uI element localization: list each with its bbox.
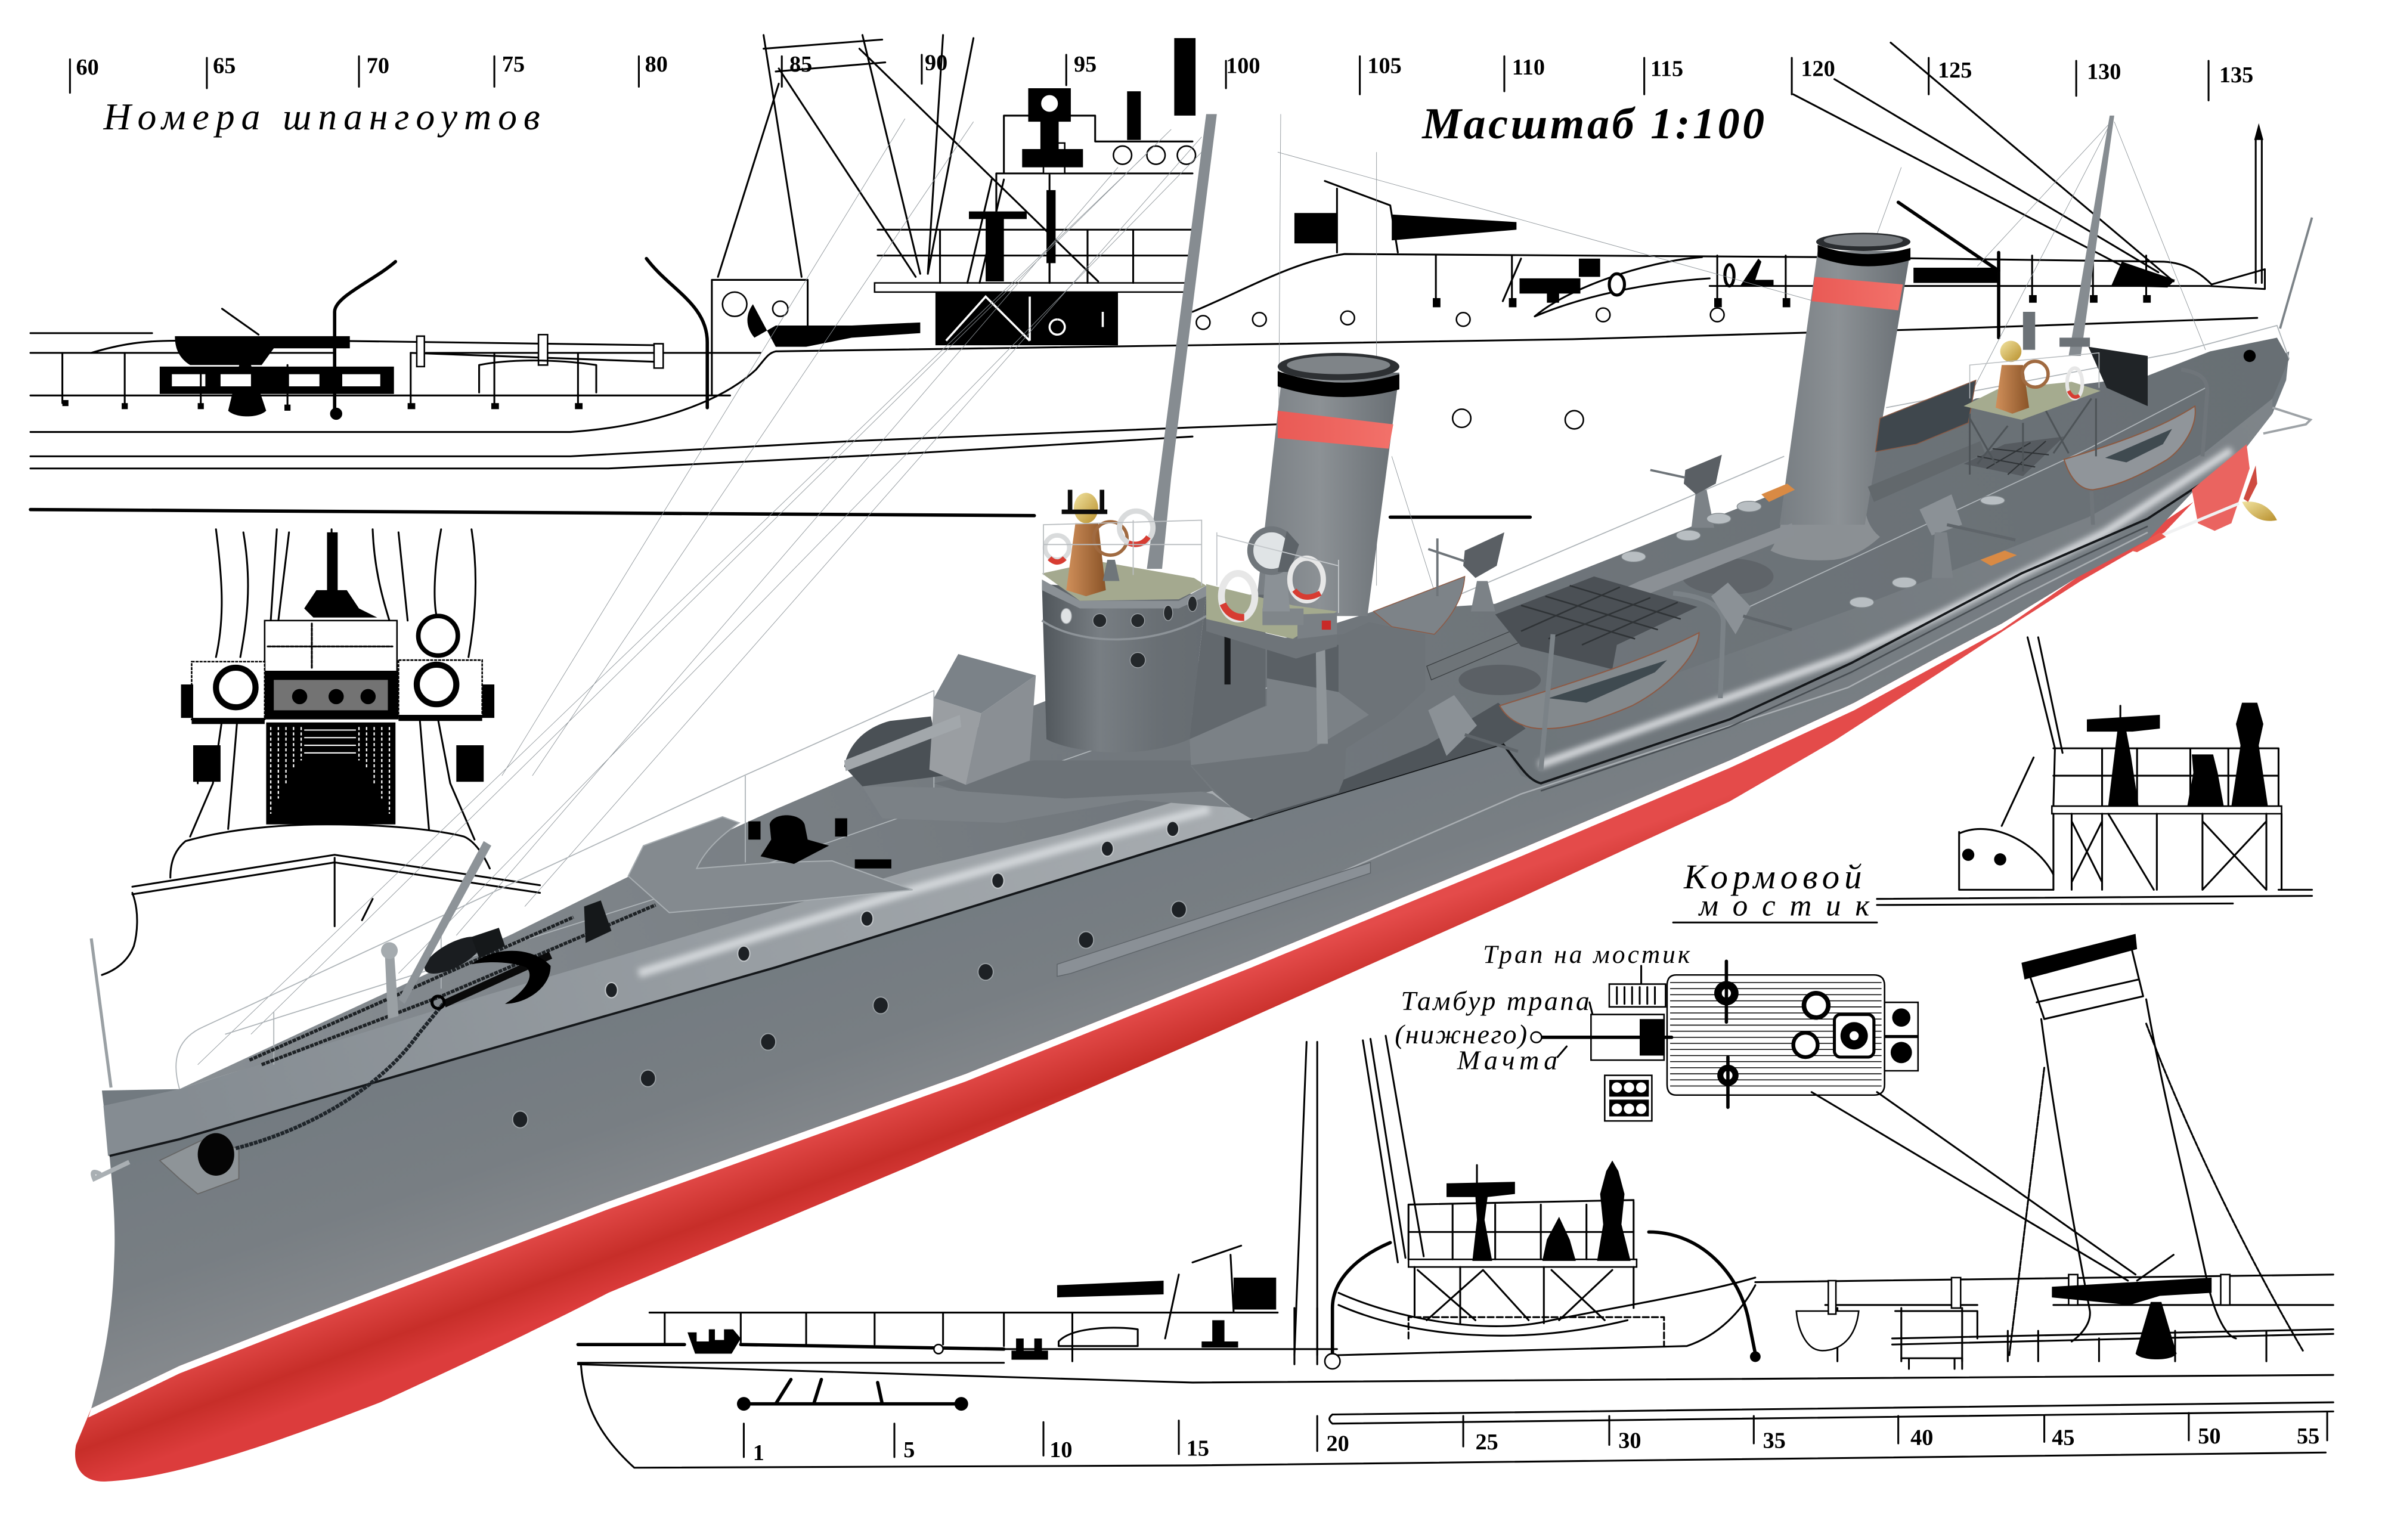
red underwater hull [75, 502, 2194, 1482]
frame numbers bottom [744, 1413, 2327, 1465]
forward far boat [1374, 577, 1465, 634]
top row portholes [605, 822, 1179, 998]
deck guns [1428, 455, 2015, 756]
sheer line [110, 461, 2236, 1156]
frame numbers top: 75 [502, 52, 525, 77]
stern fittings [2131, 218, 2312, 552]
aft boats [1875, 380, 2195, 489]
frame numbers top: 80 [645, 52, 668, 77]
drawing: aft bridge elevation [1877, 637, 2312, 905]
scuttles [1196, 308, 1724, 429]
fairlead and windlass [419, 900, 612, 981]
aft mast [2068, 116, 2114, 356]
aft gun [1294, 181, 1516, 253]
heading: scale: Масштаб 1:100 [1421, 100, 1764, 148]
anchor chain [236, 1001, 445, 1148]
aft shoulder highlight [1540, 450, 2231, 765]
aft shoulder band [1503, 398, 2272, 783]
bridge lower deck [1190, 678, 1369, 765]
bridge platform [1408, 1160, 1664, 1346]
hull lines [578, 1275, 2333, 1468]
hull lines [30, 254, 2265, 517]
davit boom [737, 1380, 968, 1411]
frame numbers bottom: 35 [1763, 1429, 1786, 1454]
plan labels: (нижнего) [1395, 1019, 1527, 1049]
boat shape [1959, 829, 2053, 890]
boat davits [1325, 1232, 1761, 1369]
deck lines [1877, 890, 2312, 905]
bridge support strut [1316, 640, 1328, 743]
boat and tubes [1797, 1275, 2230, 1369]
forecastle chains [249, 905, 655, 1065]
frame numbers top: 100 [1226, 53, 1260, 78]
aft breakwater platform [862, 779, 1232, 823]
orange gratings [1761, 484, 2017, 566]
frame numbers bottom: 45 [2052, 1426, 2075, 1451]
bridge wing and searchlight [1206, 529, 1339, 659]
mast [2028, 637, 2062, 806]
skylight grid [1495, 436, 2064, 669]
frame numbers bottom: 55 [2297, 1424, 2319, 1449]
forward funnel [1255, 353, 1399, 616]
frame numbers top: 110 [1512, 55, 1545, 80]
porthole band [263, 671, 398, 720]
helm on forward bridge [1043, 489, 1201, 596]
drawing: bow front view [102, 529, 540, 975]
plan labels: Тамбур трапа [1401, 986, 1590, 1016]
rear wall behind bridge [1267, 645, 1339, 692]
frame numbers bottom: 25 [1475, 1430, 1498, 1455]
forward shoulder band [103, 791, 1253, 1156]
stem jackstaff [91, 938, 111, 1087]
hatched cylinder [266, 723, 395, 825]
aft gun [2052, 1255, 2211, 1359]
main deck [179, 337, 2289, 1089]
frame numbers top: 105 [1367, 53, 1402, 78]
bridge [875, 38, 1195, 345]
mast [1147, 114, 1217, 569]
frame numbers top [70, 50, 2253, 100]
frame numbers bottom: 40 [1910, 1426, 1933, 1451]
deck hatches [1621, 496, 2005, 608]
deck stanchions [63, 256, 2151, 411]
drawing: bottom side profile [578, 1036, 2333, 1468]
superstructure block [1190, 622, 1425, 818]
side rubbing bar [1057, 862, 1370, 977]
breakwater and deck [171, 825, 490, 878]
torpedo tube [327, 334, 663, 392]
vent and cat davit [381, 841, 491, 1019]
aft funnel [1770, 233, 1910, 560]
long stays and ensign staff [1794, 42, 2263, 287]
frame numbers top: 60 [76, 55, 99, 80]
rail stanchions [665, 1308, 2266, 1364]
drawing: funnel outline [2009, 934, 2303, 1355]
frame numbers bottom: 50 [2198, 1424, 2220, 1449]
frame numbers bottom: 30 [1618, 1429, 1641, 1454]
forward gun [1057, 1245, 1276, 1347]
frame numbers top: 135 [2219, 63, 2253, 88]
davits [330, 259, 707, 420]
heading: frame numbers: Номера шпангоутов [103, 95, 540, 138]
capstan and bollards [748, 815, 891, 869]
frame numbers bottom: 20 [1326, 1431, 1349, 1457]
platform and frames [2052, 806, 2282, 814]
deck fittings [1503, 259, 1773, 303]
plan labels: Мачта [1457, 1045, 1557, 1075]
frame numbers bottom: 1 [753, 1440, 764, 1465]
gun [2087, 715, 2160, 806]
supports [190, 720, 475, 839]
wing boxes [191, 662, 265, 720]
recessed dark deck [1253, 703, 1526, 820]
aft dark strake [1541, 526, 2148, 791]
frame numbers top: 90 [925, 50, 947, 75]
tower block and cylinder [1042, 561, 1265, 752]
frame numbers bottom: 5 [903, 1437, 915, 1462]
forward deckhouse and mast stays [712, 35, 1098, 395]
white boot stripe [88, 578, 2076, 1418]
midship boat [1500, 593, 1723, 771]
forward shoulder highlight [639, 809, 1209, 974]
label: aft bridge: Кормовой [1683, 857, 1861, 896]
frame numbers top: 120 [1801, 57, 1835, 82]
anchor [432, 951, 550, 1008]
anchor [687, 1328, 1138, 1360]
gun mounting deck [934, 761, 1212, 798]
frame numbers bottom: 15 [1187, 1436, 1209, 1461]
thin rigging lines [198, 114, 2206, 1065]
aft bridge [1963, 312, 2148, 475]
frame numbers bottom: 10 [1049, 1437, 1072, 1462]
lower row portholes [513, 901, 1187, 1128]
frame numbers top: 130 [2087, 60, 2121, 85]
hawse hole [198, 1133, 234, 1176]
frame numbers top: 65 [213, 53, 236, 78]
forward gun [160, 309, 394, 416]
rigging lines [216, 529, 475, 657]
gun well [844, 717, 943, 786]
crane [1898, 202, 1999, 337]
forward breakwater [628, 817, 913, 913]
wheel and binnacle [304, 532, 377, 618]
bow fairlead [160, 1141, 239, 1194]
rail [2053, 748, 2278, 806]
plan labels: Трап на мостик [1483, 940, 1690, 969]
frame numbers top: 95 [1074, 52, 1097, 77]
torpedo tubes [1427, 441, 1985, 695]
lower strake lines [1252, 532, 2148, 911]
deck rails [176, 326, 2289, 1089]
label: aft bridge: мостик [1698, 890, 1870, 923]
frame numbers top: 85 [789, 52, 812, 77]
grey hull side [91, 351, 2289, 1408]
frame numbers top: 70 [367, 53, 389, 78]
drawing: top side profile [30, 35, 2265, 517]
upper house [265, 621, 397, 673]
gun barrel [844, 715, 961, 771]
frame numbers top: 115 [1650, 57, 1683, 82]
drawing: aft bridge plan [1531, 961, 2136, 1281]
frame numbers top: 125 [1938, 58, 1972, 83]
plan labels [1395, 940, 1690, 1075]
davit aft [2092, 370, 2207, 525]
anchor shackle [93, 1162, 129, 1179]
gun shield [930, 654, 1036, 785]
binnacle [2231, 703, 2268, 806]
label: aft bridge [1673, 857, 1877, 923]
mast stays [1294, 1036, 1424, 1355]
